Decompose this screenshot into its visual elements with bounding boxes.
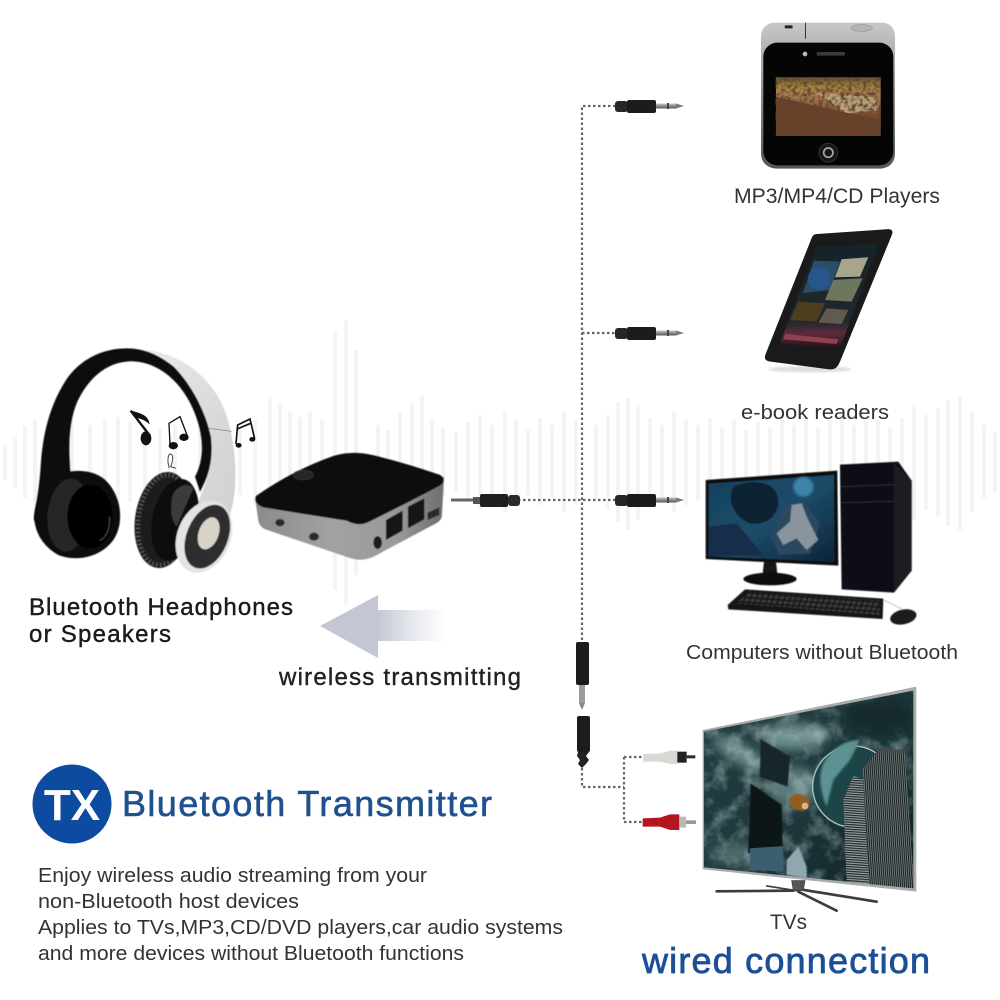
jack: vertical pair <box>576 642 590 768</box>
icon: tablet <box>765 229 892 372</box>
monitor <box>706 471 838 566</box>
black top <box>255 453 444 524</box>
keyboard <box>728 589 883 619</box>
stand <box>763 562 777 574</box>
description text: and more devices without Bluetooth functions <box>38 943 464 965</box>
badge: TX <box>32 764 112 844</box>
description text <box>38 865 563 965</box>
jack: top <box>615 100 684 113</box>
arrow: wireless direction <box>320 595 445 658</box>
label: wired connection: wired connection <box>641 940 930 981</box>
left ear cup <box>34 471 120 558</box>
mouse <box>883 600 903 610</box>
icon: headphones <box>34 348 255 581</box>
icon: desktop computer <box>706 462 918 627</box>
icon: MP3 player <box>761 23 895 169</box>
optical ports <box>386 511 403 540</box>
heading: Bluetooth Transmitter: Bluetooth Transmitter <box>122 783 492 824</box>
label: headphones: or Speakers <box>29 621 171 648</box>
music notes <box>131 411 255 468</box>
label: MP3 players: MP3/MP4/CD Players <box>734 185 940 208</box>
slide switches <box>275 519 285 526</box>
description text: Enjoy wireless audio streaming from your <box>38 865 427 887</box>
badge: TX: TX <box>44 781 100 830</box>
description text: non-Bluetooth host devices <box>38 891 299 913</box>
jack: left <box>451 494 520 507</box>
sound wave backdrop <box>5 320 995 605</box>
description text: Applies to TVs,MP3,CD/DVD players,car audio systems <box>38 917 563 939</box>
label: headphones <box>29 594 293 648</box>
screen <box>704 691 913 888</box>
jack: third <box>615 494 684 507</box>
dotted connection cables <box>518 106 644 822</box>
label: TVs: TVs <box>770 911 807 934</box>
meteor <box>788 793 810 812</box>
label: computers: Computers without Bluetooth <box>686 642 958 664</box>
planet <box>812 746 876 827</box>
frame <box>703 687 916 892</box>
tower <box>840 462 912 593</box>
icon: RCA red plug <box>643 814 696 830</box>
label: wireless transmitting: wireless transmitting <box>278 664 521 691</box>
icon: RCA white plug <box>643 751 695 764</box>
jack: second <box>615 327 684 340</box>
label: headphones: Bluetooth Headphones <box>29 594 293 621</box>
label: e-book readers: e-book readers <box>741 402 889 424</box>
silver body <box>255 477 444 560</box>
stand <box>717 881 877 911</box>
right ear cup <box>129 468 243 581</box>
white band arm <box>143 350 235 550</box>
icon: bluetooth transmitter box <box>255 453 444 560</box>
black headband <box>34 348 211 527</box>
icon: television <box>703 687 920 911</box>
dark towers <box>760 739 790 787</box>
clouds <box>709 730 761 776</box>
skyscrapers <box>843 776 875 885</box>
